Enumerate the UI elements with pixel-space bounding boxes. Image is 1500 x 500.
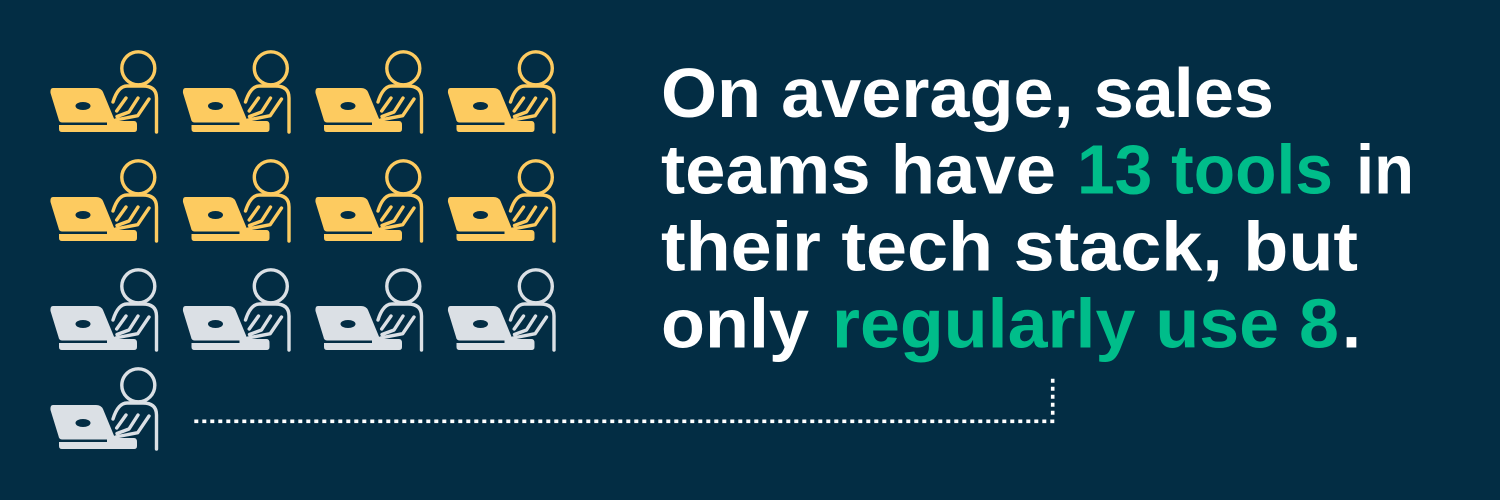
icon row: yellow person at laptop, row 2	[50, 161, 554, 241]
headline: .	[1342, 284, 1361, 362]
icon row: grey person at laptop, row 3	[50, 270, 554, 350]
headline: On average, sales	[661, 54, 1274, 132]
icon: grey person at laptop, row 4	[50, 369, 156, 449]
headline: teams have	[661, 130, 1056, 208]
headline: regularly use 8	[832, 284, 1339, 362]
headline: their tech stack, but	[661, 208, 1358, 286]
headline: only	[661, 284, 809, 362]
headline	[661, 54, 1414, 362]
headline: in	[1356, 130, 1414, 208]
dotted connector	[194, 379, 1054, 421]
headline: 13 tools	[1077, 130, 1333, 208]
icon row: yellow person at laptop, row 1	[50, 52, 554, 132]
pictogram: 13 sales tools	[50, 52, 554, 449]
